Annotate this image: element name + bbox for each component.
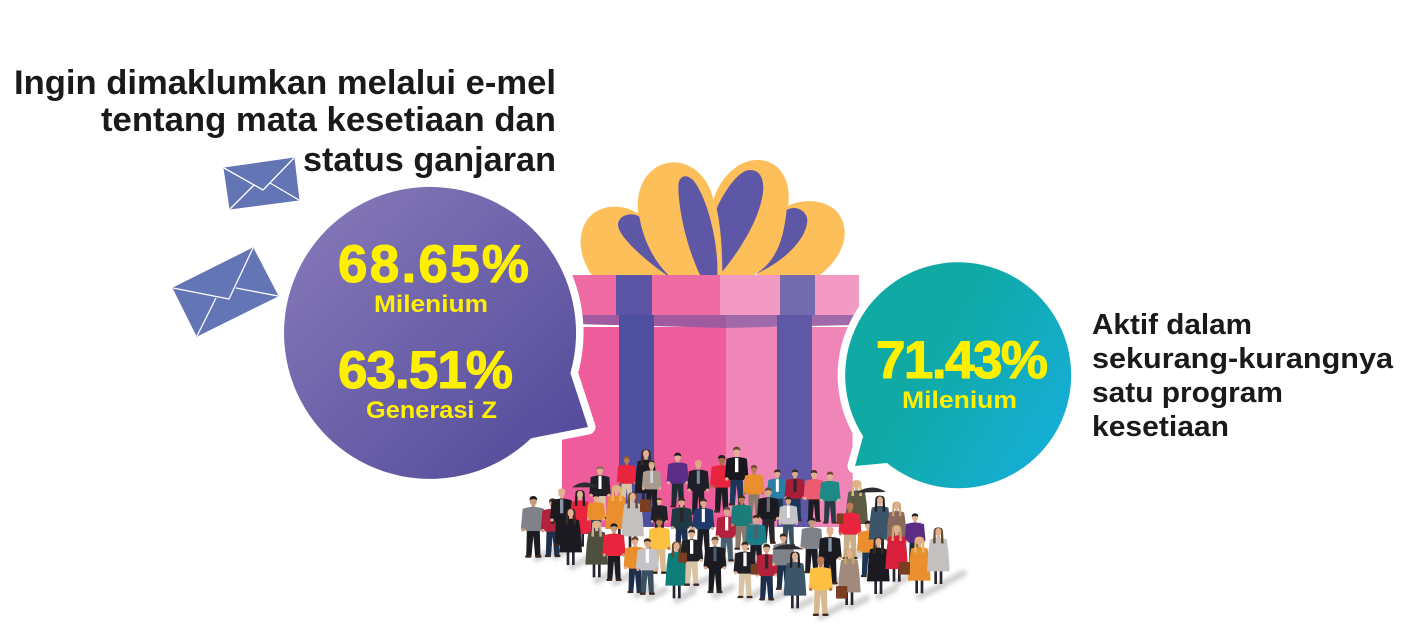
speech bubble: teal: 71.43% — [876, 331, 1048, 390]
handbags — [640, 499, 910, 599]
gift box — [562, 160, 859, 527]
speech bubble: teal — [845, 262, 1071, 488]
heading: e-mail notification — [14, 64, 556, 179]
speech bubble: teal: Milenium — [902, 387, 1017, 414]
back row — [589, 447, 868, 537]
text: active in loyalty programme — [1092, 309, 1394, 443]
gift lid — [572, 274, 859, 315]
umbrellas — [572, 482, 886, 549]
text: active in loyalty programme: Aktif dalam — [1092, 309, 1252, 341]
text: active in loyalty programme: sekurang-kurangnya — [1092, 343, 1394, 375]
front row — [602, 523, 950, 616]
icon: small envelope — [224, 158, 299, 209]
icon: large envelope — [173, 248, 278, 336]
middle row — [521, 485, 925, 577]
speech bubble: purple — [284, 187, 588, 479]
speech bubble: purple: Generasi Z — [366, 397, 497, 424]
text: active in loyalty programme: satu program — [1092, 377, 1283, 409]
bow — [581, 160, 845, 275]
heading: e-mail notification: tentang mata kesetiaan dan — [101, 101, 556, 139]
speech bubble: purple: Milenium — [374, 291, 488, 318]
heading: e-mail notification: Ingin dimaklumkan melalui e-mel — [14, 64, 556, 102]
ground shadows — [537, 548, 963, 617]
speech bubble: purple: 63.51% — [338, 341, 513, 400]
ribbon band — [574, 315, 855, 328]
crowd of people — [521, 447, 963, 617]
gift body — [562, 327, 853, 527]
heading: e-mail notification: status ganjaran — [303, 141, 556, 179]
speech bubble: purple: 68.65% — [338, 235, 529, 294]
text: active in loyalty programme: kesetiaan — [1092, 411, 1229, 443]
